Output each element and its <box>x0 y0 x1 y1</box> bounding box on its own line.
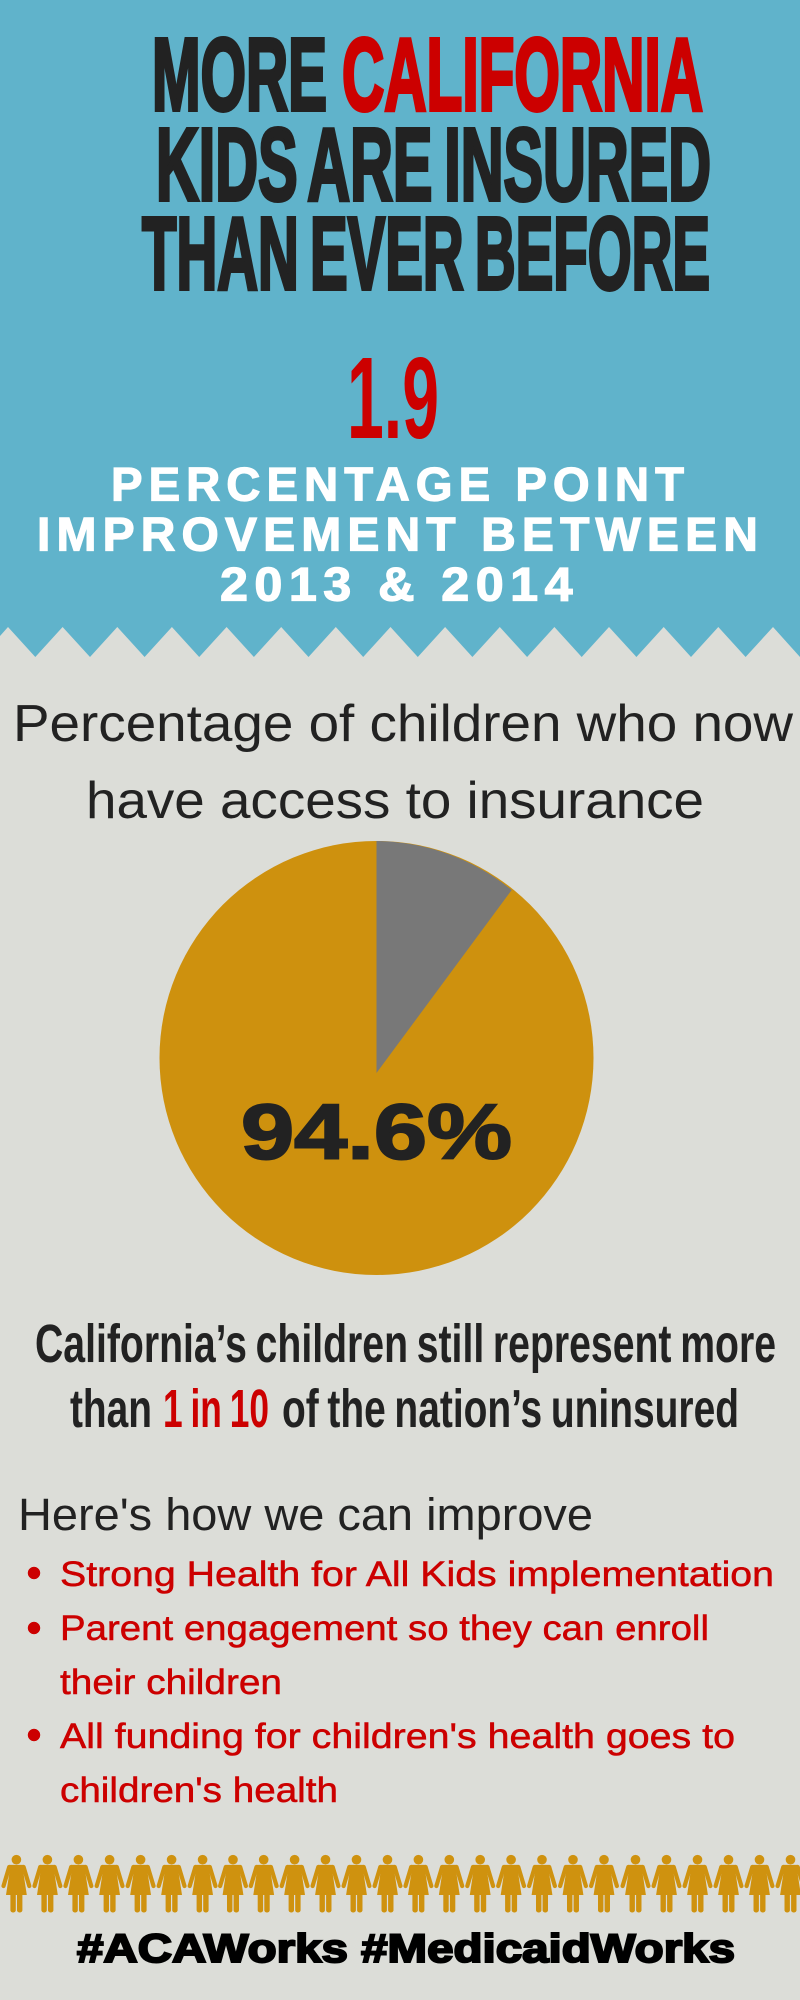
hashtags: #ACAWorks #MedicaidWorks <box>77 1927 735 1971</box>
bullet 3: All funding for children's health goes to <box>60 1717 735 1756</box>
bullet 3 <box>28 1717 735 1810</box>
heading: percentage of children: have access to insurance <box>86 772 704 830</box>
statement: 1 in 10 uninsured: 1 in 10 <box>163 1379 269 1439</box>
subtitle: percentage point improvement: IMPROVEMENT BETWEEN <box>37 508 764 560</box>
subtitle: percentage point improvement <box>37 458 764 610</box>
subheading: how we can improve: Here's how we can improve <box>18 1489 593 1540</box>
title: MORE <box>152 17 327 132</box>
heading: percentage of children <box>13 695 793 830</box>
statement: 1 in 10 uninsured <box>35 1314 776 1439</box>
bullet 2 <box>28 1609 709 1702</box>
heading: percentage of children: Percentage of children who now <box>13 695 793 753</box>
statement: 1 in 10 uninsured: than <box>70 1379 152 1439</box>
bullet 1: Strong Health for All Kids implementation <box>60 1555 774 1594</box>
bullet 2: their children <box>60 1663 282 1702</box>
big number: 1.9: 1.9 <box>347 333 439 463</box>
panel: blue header with zigzag edge <box>0 0 800 657</box>
title <box>142 17 711 311</box>
list: improvements <box>28 1555 774 1810</box>
pie chart: 94.6% <box>160 841 594 1275</box>
icon row: people <box>4 1855 800 1912</box>
bullet 2: Parent engagement so they can enroll <box>60 1609 709 1648</box>
bullet 3: children's health <box>60 1771 338 1810</box>
pie value label: 94.6% <box>241 1088 512 1176</box>
subtitle: percentage point improvement: PERCENTAGE POINT <box>111 458 690 510</box>
subtitle: percentage point improvement: 2013 & 2014 <box>220 558 579 610</box>
